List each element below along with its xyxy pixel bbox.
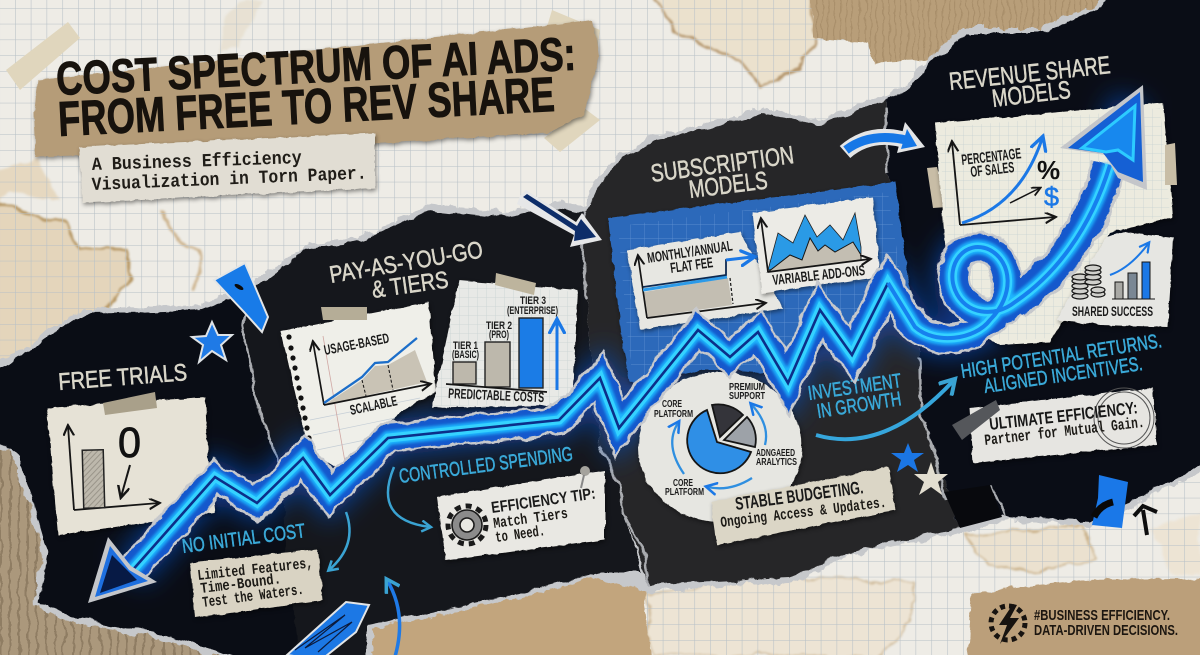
main arrow: rising line from free to revenue share bbox=[88, 85, 1147, 603]
note: efficiency tip: to Need. bbox=[494, 523, 546, 547]
note: limited features: Limited Features, bbox=[197, 555, 314, 585]
stars bbox=[891, 443, 948, 495]
note: zero cost chart: 0 bbox=[118, 419, 141, 467]
card: flat fee chart: FLAT FEE bbox=[669, 255, 714, 277]
footer tag bbox=[967, 578, 1200, 655]
pie chart circle card bbox=[638, 372, 802, 522]
panel: revenue share models bbox=[845, 51, 1177, 535]
icon: push pin bbox=[580, 466, 590, 488]
heading: pay as you go: PAY-AS-YOU-GO bbox=[327, 236, 485, 289]
card: percentage of sales: OF SALES bbox=[970, 159, 1015, 181]
tag: blue scribble bbox=[287, 602, 369, 655]
grid note: tier bars: (BASIC) bbox=[452, 349, 479, 361]
subtitle note: A Business Efficiency bbox=[92, 148, 302, 176]
panel: pay as you go and tiers bbox=[281, 190, 605, 655]
card: percentage of sales bbox=[927, 103, 1177, 345]
note: stable budgeting: STABLE BUDGETING. bbox=[734, 477, 864, 514]
loose black scrap bbox=[944, 485, 1002, 528]
note: ultimate efficiency: ULTIMATE EFFICIENCY: bbox=[988, 398, 1138, 434]
card: percentage of sales: $ bbox=[1044, 182, 1059, 212]
card: flat fee chart: MONTHLY/ANNUAL bbox=[646, 238, 734, 267]
panel: subscription background bbox=[584, 100, 960, 585]
notebook: usage-based chart: USAGE-BASED bbox=[323, 330, 390, 358]
panel: revenue share background bbox=[885, 0, 1200, 528]
card: percentage of sales: % bbox=[1037, 155, 1060, 185]
pie labels: CORE bbox=[662, 398, 682, 410]
arrowhead: down left bbox=[88, 537, 157, 603]
notebook: usage-based chart: SCALABLE bbox=[348, 392, 399, 418]
grid note: tier bars: (ENTERPRISE) bbox=[507, 305, 558, 317]
card: shared success bbox=[1057, 232, 1173, 327]
pie labels: ADNGAEED bbox=[756, 447, 795, 459]
footer text bbox=[1034, 607, 1178, 639]
panel: free trials background bbox=[0, 290, 300, 655]
pie labels: ARALYTICS bbox=[756, 456, 797, 468]
arrow: to limited features bbox=[329, 512, 350, 570]
card: variable add-ons chart bbox=[752, 197, 880, 293]
grid note: tier bars: PREDICTABLE COSTS bbox=[448, 385, 544, 405]
arrow: blue curved bbox=[845, 122, 925, 153]
icon: coins bbox=[1072, 265, 1105, 299]
heading: subscription models: SUBSCRIPTION bbox=[649, 141, 796, 188]
label: investment in growth bbox=[807, 370, 903, 423]
label: no initial cost: NO INITIAL COST bbox=[181, 520, 307, 558]
star: blue bbox=[192, 322, 232, 362]
title text: FROM FREE TO REV SHARE bbox=[57, 68, 556, 147]
panel: subscription models bbox=[608, 141, 954, 495]
tag: blue with black hook bbox=[1092, 475, 1128, 528]
grid note: tier bars: TIER 1 bbox=[453, 340, 478, 352]
label: high potential returns bbox=[959, 330, 1163, 398]
cardboard: bottom center bbox=[279, 570, 652, 655]
note: stable budgeting: Ongoing Access & Updates. bbox=[720, 495, 887, 532]
note: ultimate efficiency bbox=[952, 388, 1157, 463]
tag: blue with mark bbox=[214, 263, 268, 332]
heading: subscription models: MODELS bbox=[687, 167, 769, 204]
pie labels: PLATFORM bbox=[665, 486, 704, 498]
label: investment in growth: INVESTMENT bbox=[807, 370, 903, 405]
heading: pay as you go bbox=[327, 236, 485, 304]
icon: gear with lightning bolt bbox=[991, 604, 1025, 644]
grid note: tier bars: TIER 2 bbox=[486, 320, 512, 332]
heading: subscription models bbox=[649, 141, 796, 204]
heading: revenue share bbox=[948, 51, 1112, 113]
subtitle note: Visualization in Torn Paper. bbox=[91, 163, 367, 196]
pie labels: SUPPORT bbox=[729, 390, 765, 402]
card: percentage of sales: PERCENTAGE bbox=[961, 145, 1022, 169]
note: zero cost chart bbox=[47, 392, 215, 535]
note: efficiency tip bbox=[437, 470, 605, 560]
pie labels: CORE bbox=[673, 477, 693, 489]
blue glow behind arrow bbox=[130, 100, 1130, 573]
heading: pay as you go: & TIERS bbox=[370, 266, 450, 304]
panel: pay as you go background bbox=[243, 207, 642, 655]
card: shared success: SHARED SUCCESS bbox=[1072, 303, 1153, 319]
cardboard: top right bbox=[812, 0, 1113, 63]
note: limited features: Time-Bound. bbox=[200, 571, 282, 598]
title text: COST SPECTRUM OF AI ADS: bbox=[55, 27, 577, 105]
heading: revenue share: MODELS bbox=[990, 76, 1072, 113]
icon: gear bbox=[448, 506, 486, 544]
pie labels: PLATFORM bbox=[654, 408, 693, 420]
pie labels bbox=[654, 381, 797, 498]
torn seams between panels bbox=[243, 107, 1005, 585]
heading: revenue share: REVENUE SHARE bbox=[948, 51, 1112, 96]
label: investment in growth: IN GROWTH bbox=[815, 388, 903, 423]
note: efficiency tip: Match Tiers bbox=[492, 506, 569, 533]
title text bbox=[55, 27, 577, 147]
label: high potential returns: ALIGNED INCENTIVES. bbox=[983, 353, 1144, 398]
note: limited features bbox=[190, 549, 323, 618]
label: controlled spending: CONTROLLED SPENDING bbox=[398, 443, 574, 488]
arrow: to efficiency tip bbox=[388, 467, 430, 527]
arrow: growth curve bbox=[816, 380, 954, 439]
note: limited features: Test the Waters. bbox=[201, 582, 305, 612]
arrow: small black up bbox=[1134, 506, 1157, 535]
grid note: tier bars: (PRO) bbox=[489, 329, 509, 341]
grid note: tier bars bbox=[432, 273, 578, 408]
pie arrows bbox=[672, 405, 766, 488]
pie chart bbox=[687, 404, 756, 473]
tape pieces bbox=[6, 10, 600, 152]
panel: free trials bbox=[47, 263, 350, 618]
arrowhead: up right bbox=[1060, 85, 1147, 190]
note: stable budgeting bbox=[711, 467, 895, 545]
subtitle note bbox=[79, 133, 375, 203]
heading: free trials: FREE TRIALS bbox=[57, 359, 188, 396]
arrow: dark chevron bbox=[517, 190, 602, 247]
card: flat fee chart bbox=[627, 232, 783, 330]
blueprint sheet bbox=[608, 182, 910, 385]
note: efficiency tip: EFFICIENCY TIP: bbox=[490, 486, 597, 517]
cardboard: bottom left bbox=[0, 435, 265, 655]
icon: growth bars bbox=[1112, 262, 1155, 299]
pie labels: PREMIUM bbox=[729, 381, 765, 393]
card: variable add-ons chart: VARIABLE ADD-ONS bbox=[772, 263, 866, 289]
grid note: tier bars: TIER 3 bbox=[520, 295, 546, 307]
arrow: bottom curve bbox=[387, 580, 400, 655]
title banner bbox=[6, 10, 600, 157]
notebook: usage-based chart bbox=[281, 302, 436, 468]
